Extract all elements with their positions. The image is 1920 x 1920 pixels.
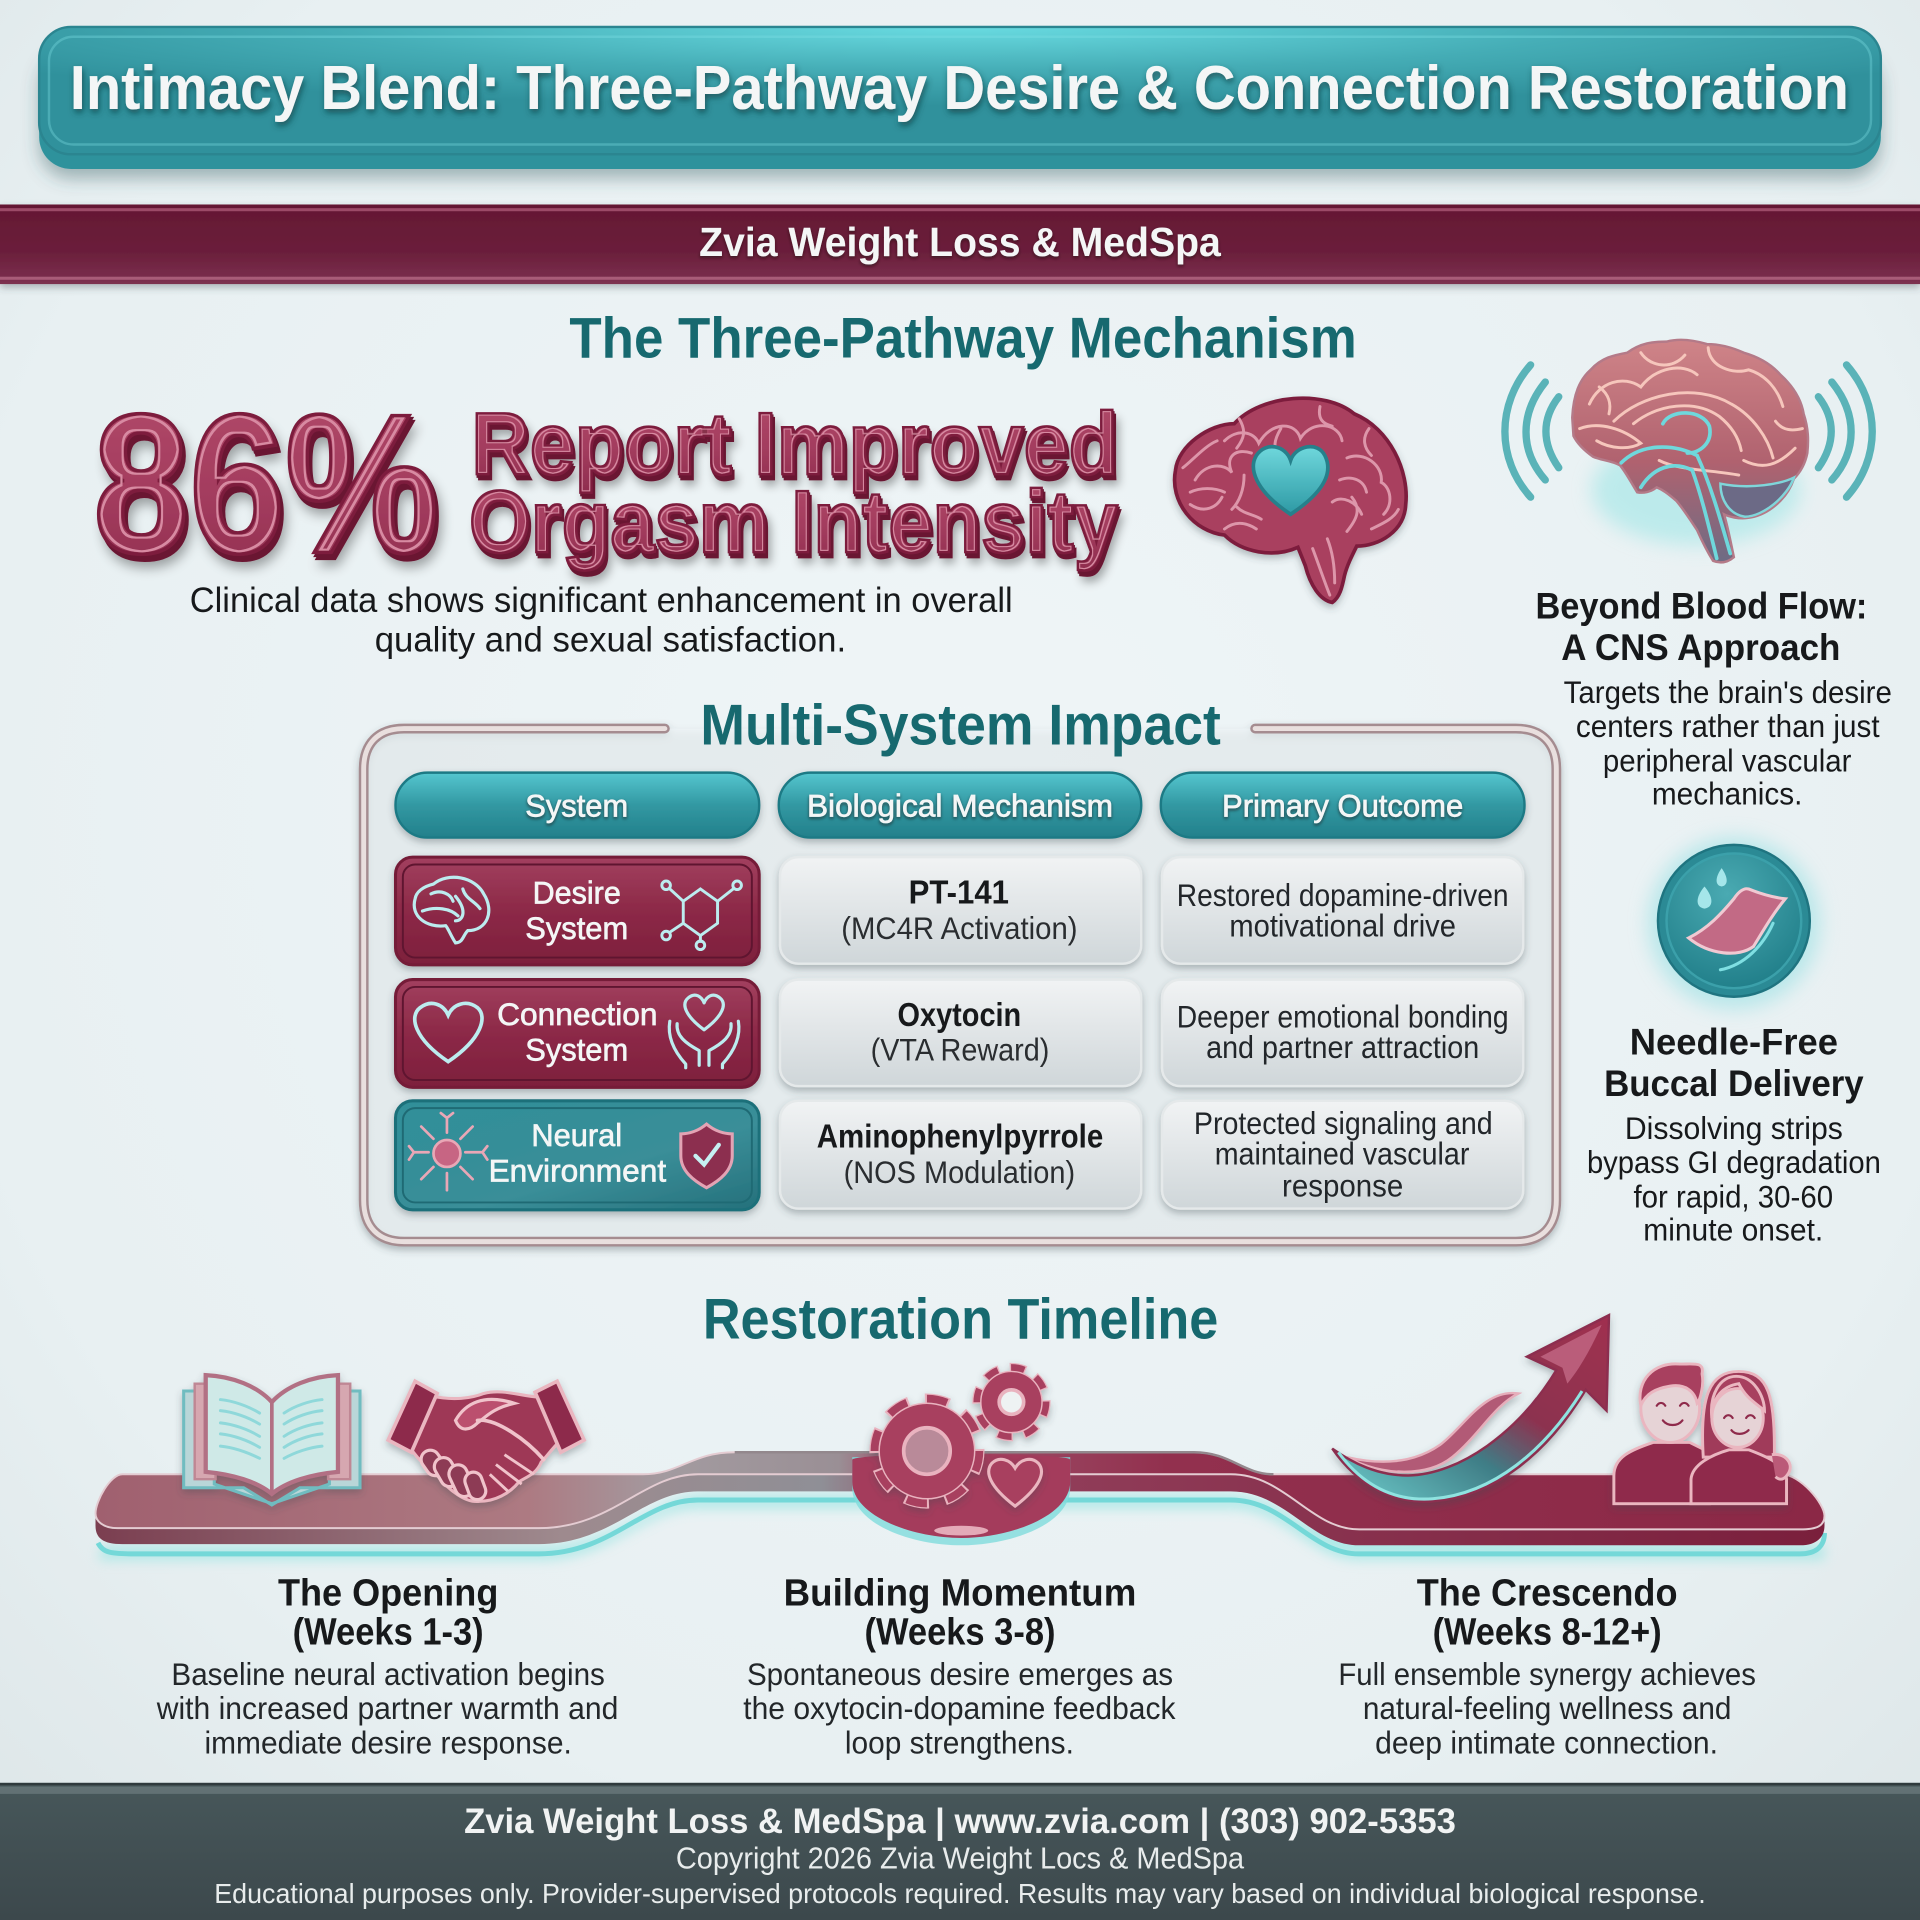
footer disclaimer: Educational purposes only. Provider-supervised protocols required. Results may vary based on individual biological response. [214, 1878, 1706, 1909]
signal waves right [1818, 365, 1872, 497]
heading: restoration timeline: Restoration Timeline [703, 1287, 1218, 1351]
delivery heading: Buccal Delivery [1604, 1062, 1864, 1104]
table header: system [396, 773, 759, 838]
phase: building momentum [743, 1572, 1176, 1760]
brand name: Zvia Weight Loss & MedSpa [699, 219, 1221, 265]
phase: the crescendo: natural-feeling wellness and [1363, 1690, 1731, 1726]
woman [1691, 1371, 1790, 1504]
title banner [39, 27, 1881, 169]
row: desire system: Desire [533, 875, 621, 911]
cell: aminophenylpyrrole [780, 1101, 1141, 1209]
footer [0, 1783, 1920, 1920]
phase: building momentum: Building Momentum [784, 1572, 1136, 1614]
cell: aminophenylpyrrole: (NOS Modulation) [844, 1154, 1075, 1190]
cell: PT-141: PT-141 [909, 875, 1009, 912]
phase: building momentum: loop strengthens. [845, 1724, 1074, 1760]
phase: the crescendo [1338, 1572, 1756, 1760]
delivery body: for rapid, 30-60 [1633, 1179, 1833, 1214]
row: connection system [396, 980, 759, 1087]
icon: molecule [662, 881, 741, 950]
cell: oxytocin: (VTA Reward) [871, 1031, 1049, 1067]
delivery body: Dissolving strips [1625, 1111, 1843, 1146]
brand band [0, 204, 1920, 284]
side body: centers rather than just [1576, 709, 1880, 744]
panel heading: Multi-System Impact [700, 693, 1221, 757]
table header: primary outcome: Primary Outcome [1222, 788, 1463, 824]
side body: Targets the brain's desire [1564, 675, 1892, 710]
stat description: Clinical data shows significant enhancement in overall [190, 580, 1013, 620]
phase: the opening: with increased partner warmth and [156, 1690, 618, 1726]
row: neural environment: Environment [489, 1153, 666, 1189]
delivery body: bypass GI degradation [1587, 1145, 1881, 1180]
delivery body [1587, 1111, 1881, 1247]
heart [1253, 447, 1328, 514]
phase: building momentum: the oxytocin-dopamine feedback [743, 1690, 1176, 1726]
icon: rising arrow [1332, 1315, 1609, 1501]
panel: multi-system impact [364, 693, 1556, 1242]
phase: the crescendo: (Weeks 8-12+) [1433, 1611, 1662, 1653]
cell: PT-141: (MC4R Activation) [841, 910, 1078, 946]
row: neural environment: Neural [531, 1117, 622, 1153]
stat description [190, 580, 1013, 659]
cell: outcome neural: response [1282, 1168, 1403, 1203]
platform edge and top [96, 1452, 1824, 1545]
phase: the opening: (Weeks 1-3) [293, 1611, 484, 1653]
man [1614, 1364, 1709, 1504]
cell: outcome neural: Protected signaling and [1194, 1106, 1493, 1141]
phase: the opening: immediate desire response. [204, 1724, 572, 1760]
stat number: 86% [93, 373, 438, 595]
row: connection system: Connection [497, 996, 658, 1032]
row: connection system: System [525, 1031, 628, 1067]
side note: needle-free buccal delivery [1587, 1020, 1881, 1247]
side body [1564, 675, 1892, 811]
icon: dissolving strip coin [1648, 838, 1820, 1009]
stat callout: 86% [93, 373, 1118, 595]
cell: aminophenylpyrrole: Aminophenylpyrrole [817, 1118, 1103, 1155]
brain [1572, 340, 1808, 562]
side heading [1536, 584, 1867, 668]
side note: beyond blood flow [1536, 584, 1892, 811]
stat label [469, 394, 1118, 571]
phase: the crescendo: The Crescendo [1417, 1572, 1678, 1614]
heading: three-pathway mechanism: The Three-Pathway Mechanism [569, 307, 1357, 371]
side body: mechanics. [1652, 776, 1802, 811]
cell: outcome connection: Deeper emotional bonding [1177, 999, 1509, 1034]
large gear [877, 1401, 977, 1501]
side heading: Beyond Blood Flow: [1536, 584, 1867, 626]
cell: outcome connection: and partner attraction [1206, 1030, 1479, 1065]
stat description: quality and sexual satisfaction. [375, 619, 846, 659]
cerebellum [1720, 478, 1794, 517]
icon: couple [1614, 1364, 1790, 1504]
delivery heading [1604, 1020, 1864, 1104]
stat label: Report Improved [471, 394, 1118, 493]
footer contact line: Zvia Weight Loss & MedSpa | www.zvia.com | (303) 902-5353 [464, 1801, 1456, 1841]
delivery body: minute onset. [1643, 1212, 1823, 1247]
side body: peripheral vascular [1603, 743, 1851, 778]
icon: neuron [409, 1113, 487, 1190]
cell: outcome desire: motivational drive [1229, 909, 1456, 944]
smiles [1657, 1403, 1755, 1434]
cell: oxytocin [780, 980, 1141, 1086]
icon: handshake [388, 1381, 584, 1502]
phase: building momentum: Spontaneous desire emerges as [747, 1656, 1173, 1692]
row: neural environment [396, 1101, 759, 1210]
icon: brain outline [414, 877, 489, 943]
cell: outcome neural: maintained vascular [1215, 1136, 1469, 1171]
table header: biological mechanism: Biological Mechanism [807, 788, 1113, 824]
icon: hands holding heart [669, 995, 739, 1068]
phase: the opening: The Opening [278, 1572, 498, 1614]
icon: gears and heart [877, 1369, 1044, 1506]
cell: PT-141 [780, 857, 1141, 964]
icon: open book [184, 1375, 360, 1505]
phase: the opening [156, 1572, 618, 1760]
icon: heart outline [415, 1003, 482, 1062]
side heading: A CNS Approach [1561, 626, 1840, 668]
signal waves left [1505, 365, 1559, 497]
icon: brain with heart [1175, 398, 1406, 602]
small heart [989, 1459, 1041, 1506]
row: desire system [396, 857, 759, 965]
phase: the crescendo: deep intimate connection. [1375, 1724, 1718, 1760]
cell: oxytocin: Oxytocin [898, 997, 1021, 1034]
cell: outcome desire: Restored dopamine-driven [1177, 878, 1509, 913]
icon: shield with check [681, 1124, 732, 1188]
cell: outcome neural [1162, 1101, 1523, 1209]
small gear [978, 1369, 1044, 1435]
panel frame [364, 729, 1556, 1242]
cell: outcome connection [1162, 980, 1523, 1086]
phase: the opening: Baseline neural activation begins [171, 1656, 605, 1692]
icon: CNS brain with signal waves [1505, 340, 1872, 562]
stat label: Orgasm Intensity [469, 472, 1118, 571]
delivery heading: Needle-Free [1630, 1020, 1838, 1062]
phase: the crescendo: Full ensemble synergy achieves [1338, 1656, 1756, 1692]
row: desire system: System [525, 910, 628, 946]
center disc [852, 1457, 1070, 1545]
table header: biological mechanism [779, 773, 1141, 838]
teal under-glow [98, 1494, 1824, 1560]
phase: building momentum: (Weeks 3-8) [864, 1611, 1056, 1653]
timeline platform [96, 1452, 1824, 1560]
cell: outcome desire [1162, 857, 1523, 964]
footer copyright: Copyright 2026 Zvia Weight Locs & MedSpa [676, 1842, 1245, 1876]
table header: system: System [525, 788, 628, 824]
table header: primary outcome [1161, 773, 1524, 838]
